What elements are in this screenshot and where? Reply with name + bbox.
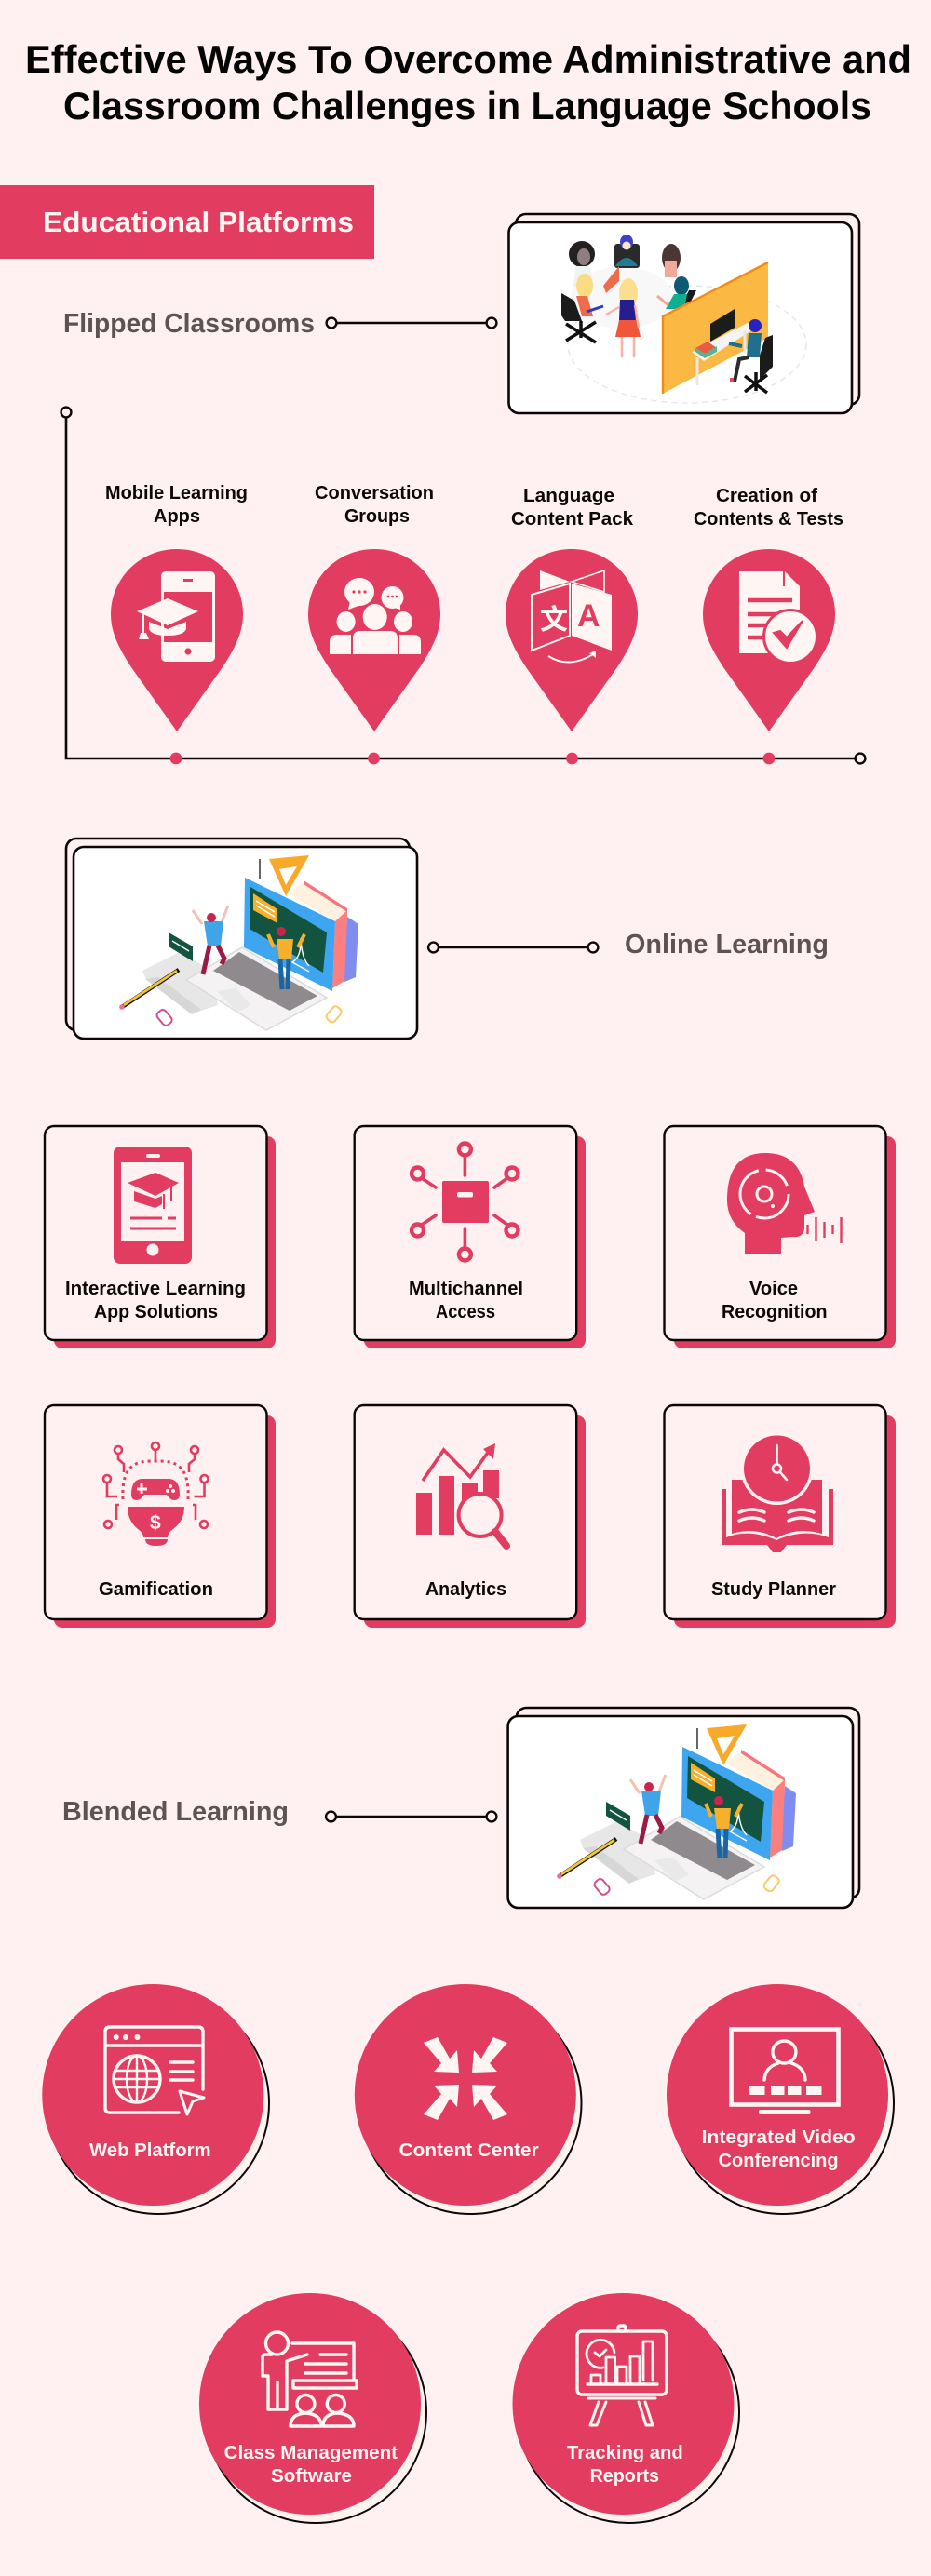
icon: inward arrows <box>424 2037 507 2120</box>
circle: Class Management Software <box>199 2293 426 2523</box>
label <box>105 483 248 527</box>
label: Groups <box>344 506 410 527</box>
icon: teacher at board <box>263 2332 357 2426</box>
label: Class Management <box>224 2443 398 2463</box>
icon: browser with globe <box>105 2027 204 2114</box>
label <box>567 2443 683 2487</box>
circle: Tracking and Reports <box>512 2293 739 2523</box>
pin: Creation of Contents & Tests <box>694 486 843 731</box>
label <box>694 486 843 530</box>
label: Analytics <box>425 1579 506 1600</box>
heading: Online Learning: Online Learning <box>625 930 829 959</box>
icon: phone with graduation cap <box>137 571 215 662</box>
teal seated person <box>657 276 696 309</box>
label: Software <box>271 2466 352 2487</box>
connector: Flipped Classrooms <box>327 318 496 328</box>
label: Access <box>436 1302 495 1322</box>
label: Conversation <box>315 483 434 503</box>
label: Creation of <box>716 486 817 506</box>
label: Gamification <box>99 1579 213 1600</box>
icon: game controller bulb <box>103 1442 209 1546</box>
card: Interactive Learning App Solutions <box>45 1126 276 1348</box>
timeline axis <box>61 408 865 764</box>
label: Reports <box>590 2466 659 2487</box>
heading: Blended Learning: Blended Learning <box>62 1797 289 1827</box>
label: Integrated Video <box>702 2127 856 2148</box>
label: Content Pack <box>511 509 634 530</box>
seated person at desk <box>729 319 773 393</box>
illustration: laptop classroom <box>119 855 358 1030</box>
heading: Flipped Classrooms: Flipped Classrooms <box>63 309 315 339</box>
circle: Web Platform <box>42 1984 269 2214</box>
icon: bar chart with magnifier <box>416 1443 506 1546</box>
pin: Language Content Pack <box>506 486 638 731</box>
label: Contents & Tests <box>694 509 843 530</box>
label: Conferencing <box>719 2151 839 2171</box>
image card: online learning illustration <box>66 839 417 1039</box>
label: App Solutions <box>94 1302 218 1322</box>
marker <box>703 549 835 731</box>
desk with computer <box>692 309 756 385</box>
title: Effective Ways To Overcome Administrative and <box>25 37 911 81</box>
icon: game controller bulb: $ <box>150 1512 161 1534</box>
left seated person <box>561 274 603 342</box>
card: Voice Recognition <box>665 1126 896 1348</box>
title: Classroom Challenges in Language Schools <box>63 84 871 127</box>
label <box>224 2443 398 2487</box>
icon: learning app phone <box>114 1147 192 1264</box>
icon: network nodes <box>412 1143 518 1260</box>
icon: translation book <box>532 570 612 663</box>
connector: Blended Learning <box>326 1812 496 1821</box>
label: Content Center <box>399 2140 539 2161</box>
image card: blended learning illustration <box>508 1708 859 1908</box>
card: Analytics <box>355 1405 586 1628</box>
label: Multichannel <box>409 1279 523 1299</box>
teacher figure <box>268 927 304 989</box>
standing woman <box>606 278 641 357</box>
connector: Online Learning <box>428 943 598 952</box>
marker <box>308 549 440 731</box>
card: Study Planner <box>665 1405 896 1628</box>
top seated people <box>569 235 681 293</box>
label <box>315 483 434 527</box>
marker <box>111 549 243 731</box>
label: Interactive Learning <box>65 1279 246 1299</box>
student figure <box>193 906 228 974</box>
orange partition wall <box>663 262 768 394</box>
card: Gamification <box>45 1405 276 1628</box>
icon: head with sound waves <box>727 1153 842 1254</box>
label: Study Planner <box>711 1579 836 1600</box>
label: Voice <box>749 1279 798 1299</box>
pin: Conversation Groups <box>308 483 440 731</box>
icon: video conference monitor <box>732 2029 838 2114</box>
label <box>511 486 634 530</box>
section banner: Educational Platforms <box>0 185 374 259</box>
circle: Content Center <box>355 1984 581 2214</box>
label <box>409 1279 523 1322</box>
label: Language <box>523 486 614 506</box>
label: Recognition <box>722 1302 827 1322</box>
section banner: Educational Platforms: Educational Platforms <box>43 206 354 238</box>
icon: presentation easel with chart <box>577 2326 667 2425</box>
icon: translation book: A <box>577 598 600 634</box>
label: Apps <box>154 506 200 527</box>
marker <box>506 549 638 731</box>
image card: flipped classroom illustration <box>508 214 859 413</box>
label: Mobile Learning <box>105 483 248 503</box>
card: Multichannel Access <box>355 1126 586 1348</box>
label <box>702 2127 856 2171</box>
icon: document with check <box>739 571 818 664</box>
circle: Integrated Video Conferencing <box>667 1984 894 2214</box>
pin: Mobile Learning Apps <box>105 483 248 731</box>
label <box>722 1279 827 1322</box>
icon: group with speech bubbles <box>330 578 421 654</box>
title <box>25 37 911 127</box>
icon: book with clock <box>722 1432 833 1552</box>
label <box>65 1279 246 1322</box>
label: Web Platform <box>89 2140 211 2161</box>
label: Tracking and <box>567 2443 683 2463</box>
icon: translation book: 文 <box>540 605 568 636</box>
